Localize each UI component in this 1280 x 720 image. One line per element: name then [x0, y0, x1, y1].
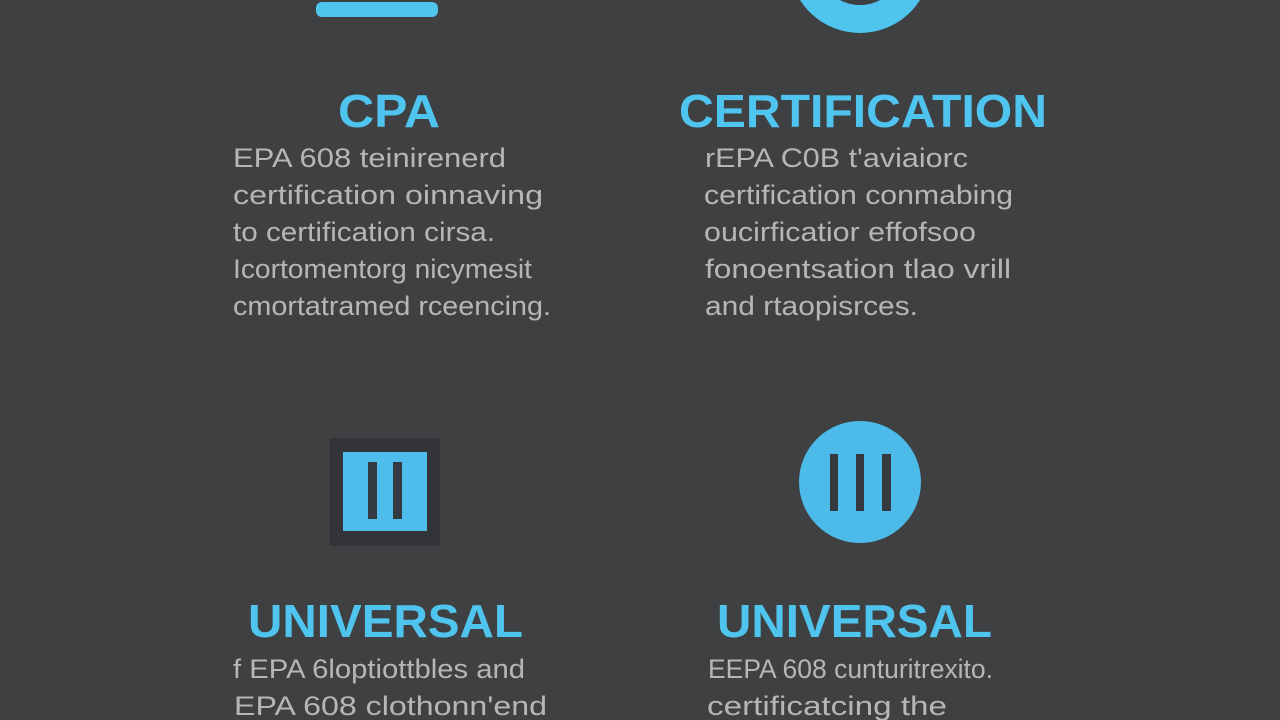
panel: CPA — [233, 2, 551, 321]
icon: rounded bar — [316, 2, 438, 17]
heading: Universal: UNIVERSAL — [248, 595, 523, 647]
text block: Certification description: and rtaopisrces. — [705, 291, 918, 321]
text block: CPA description: certification oinnaving — [233, 180, 543, 210]
icon: circle with three bars — [799, 421, 921, 543]
panel: Universal, square icon — [233, 438, 547, 720]
text block: CPA description: cmortatramed rceencing. — [233, 291, 551, 321]
panel: Certification — [679, 0, 1047, 321]
panel: Universal, circle icon — [707, 421, 993, 720]
text block: CPA description: to certification cirsa. — [233, 217, 495, 247]
text block: Certification description — [704, 143, 1013, 321]
text block: CPA description — [233, 143, 551, 321]
heading: CPA: CPA — [338, 85, 440, 137]
text block: Certification description: fonoentsation tlao vrill — [705, 254, 1011, 284]
text block: CPA description: Icortomentorg nicymesit — [233, 254, 533, 284]
text block: Certification description: certification conmabing — [704, 180, 1013, 210]
text block: Universal description — [233, 654, 547, 720]
text block: Certification description: rEPA C0B t'aviaiorc — [705, 143, 968, 173]
text block: Universal description: f EPA 6loptiottbles and — [233, 654, 525, 684]
heading: Universal: UNIVERSAL — [717, 595, 992, 647]
icon: ring — [803, 0, 917, 19]
heading: Certification: CERTIFICATION — [679, 85, 1047, 137]
text block: Universal description: EEPA 608 cunturitrexito. — [708, 654, 993, 684]
text block: Universal description — [707, 654, 993, 720]
text block: CPA description: EPA 608 teinirenerd — [233, 143, 506, 173]
text block: Certification description: oucirficatior effofsoo — [704, 217, 976, 247]
icon: square with two bars — [330, 438, 440, 546]
